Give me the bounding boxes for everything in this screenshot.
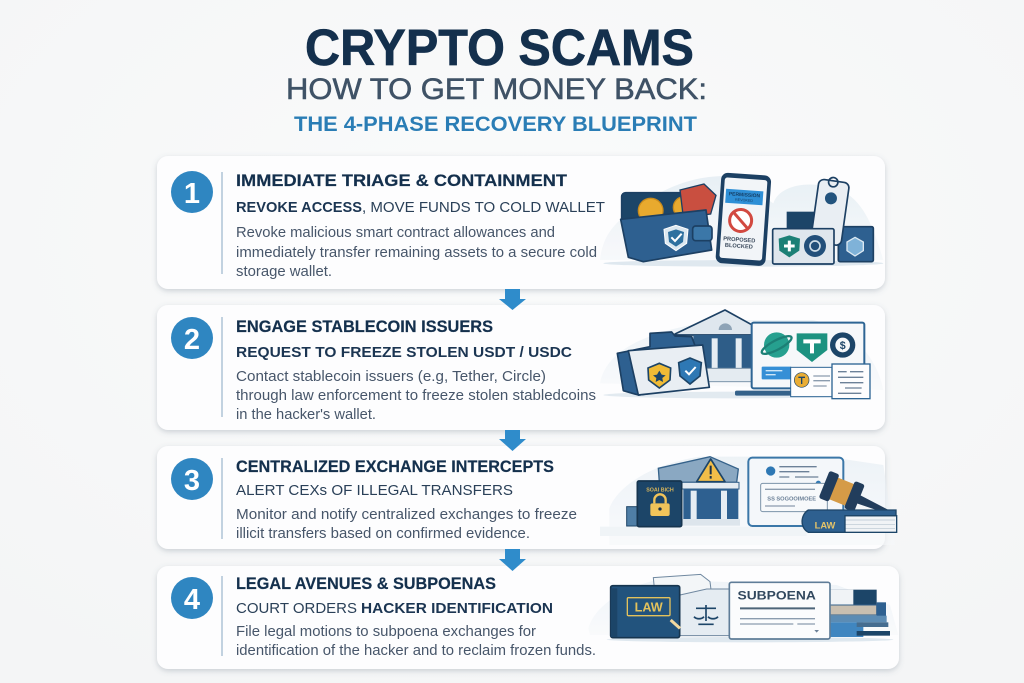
title: CRYPTO SCAMS <box>305 19 694 76</box>
subheading <box>236 199 605 216</box>
subheading: REVOKE ACCESS <box>236 199 362 216</box>
locked file: SOAI BICH <box>646 488 674 494</box>
subheading: HACKER IDENTIFICATION <box>361 600 553 617</box>
phone <box>715 172 771 266</box>
alert monitor <box>748 458 843 526</box>
illustration: locked file, exchange alert, gavel and law book <box>600 457 897 545</box>
gavel and law book: LAW <box>815 520 836 530</box>
illustration: case file, bank and issuer monitor <box>600 310 883 399</box>
heading: CENTRALIZED EXCHANGE INTERCEPTS <box>236 457 554 476</box>
phone: BLOCKED <box>725 243 753 251</box>
card background <box>157 156 885 289</box>
subheading: COURT ORDERS <box>236 600 357 617</box>
monitor: $ <box>840 340 846 352</box>
locked file <box>627 481 682 527</box>
card background <box>157 446 885 549</box>
heading: ENGAGE STABLECOIN ISSUERS <box>236 317 493 336</box>
heading: LEGAL AVENUES & SUBPOENAS <box>236 574 496 593</box>
illustration: law book, folder, subpoena and book stack <box>588 574 898 642</box>
description: through law enforcement to freeze stolen stabledcoins <box>236 388 596 404</box>
description <box>236 507 577 542</box>
description: illicit transfers based on confirmed evidence. <box>236 526 530 542</box>
wallet <box>621 184 716 262</box>
subpoena document: SUBPOENA <box>737 588 816 602</box>
bank <box>675 310 760 382</box>
number badge 1 <box>171 171 213 213</box>
law book <box>611 586 680 638</box>
case folder <box>617 332 709 395</box>
subheading: REQUEST TO FREEZE STOLEN USDT / USDC <box>236 344 572 361</box>
number badge 3: 3 <box>184 465 200 497</box>
book stack <box>830 590 890 637</box>
description <box>236 369 596 423</box>
card background <box>157 566 899 669</box>
subheading: , MOVE FUNDS TO COLD WALLET <box>362 199 605 216</box>
panel: phase 3 <box>157 446 897 549</box>
header <box>286 19 707 136</box>
subheading: ALERT CEXs OF ILLEGAL TRANSFERS <box>236 482 513 499</box>
number badge 2 <box>171 317 213 359</box>
alert monitor: SS SOGOOIMOEE <box>767 496 816 502</box>
description: in the hacker's wallet. <box>236 407 376 423</box>
law book: LAW <box>635 601 663 615</box>
number badge 1: 1 <box>184 178 200 210</box>
arrow: phase 2 to 3 <box>499 430 526 451</box>
phone: PERMISSION <box>729 191 761 199</box>
tagline: THE 4-PHASE RECOVERY BLUEPRINT <box>294 113 697 136</box>
description: storage wallet. <box>236 264 332 280</box>
illustration: wallet, phone and cold storage <box>600 172 883 267</box>
monitor <box>735 323 870 399</box>
card background <box>157 305 885 430</box>
heading: IMMEDIATE TRIAGE & CONTAINMENT <box>236 171 568 190</box>
arrow: phase 3 to 4 <box>499 549 526 571</box>
number badge 4 <box>171 577 213 619</box>
number badge 2: 2 <box>184 324 200 356</box>
description: immediately transfer remaining assets to a secure cold <box>236 245 597 261</box>
arrow: phase 1 to 2 <box>499 289 526 310</box>
subtitle: HOW TO GET MONEY BACK: <box>286 73 707 106</box>
phone: REVOKED <box>735 198 753 203</box>
panel: phase 2 <box>157 305 885 430</box>
description: identification of the hacker and to reclaim frozen funds. <box>236 643 596 659</box>
gavel and law book <box>802 471 897 532</box>
description: Revoke malicious smart contract allowances and <box>236 225 555 241</box>
exchange building <box>658 457 740 526</box>
description: Monitor and notify centralized exchanges to freeze <box>236 507 577 523</box>
phone: PROPOSED <box>723 236 755 245</box>
description <box>236 624 596 659</box>
back paper <box>653 574 712 595</box>
number badge 4: 4 <box>184 584 200 616</box>
panel: phase 4 <box>157 566 899 669</box>
subpoena document <box>729 582 830 639</box>
description <box>236 225 597 280</box>
description: File legal motions to subpoena exchanges for <box>236 624 536 640</box>
number badge 3 <box>171 458 213 500</box>
cold storage devices <box>773 176 873 264</box>
folder with scales <box>680 589 730 636</box>
description: Contact stablecoin issuers (e.g, Tether, Circle) <box>236 369 546 385</box>
panel: phase 1 <box>157 156 885 289</box>
subheading <box>236 600 553 617</box>
